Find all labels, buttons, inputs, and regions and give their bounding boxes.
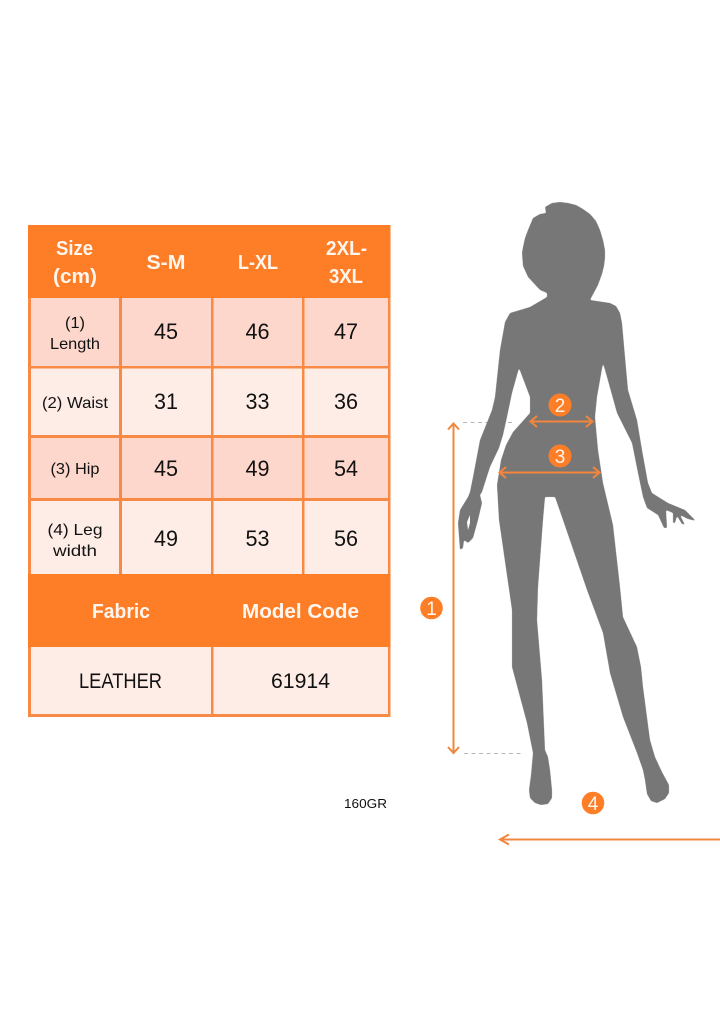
- row: leg width: width: [52, 543, 97, 560]
- header row: Size: [56, 238, 93, 260]
- dashed guide lines: [463, 422, 524, 754]
- row: hip: 49: [246, 456, 270, 481]
- row: waist: 36: [334, 389, 358, 414]
- row: waist: (2) Waist: [42, 395, 109, 412]
- fabric and model code values: 61914: [271, 670, 330, 693]
- size table: [28, 225, 390, 717]
- row: hip: 45: [154, 456, 178, 481]
- header row: 3XL: [329, 266, 363, 288]
- arrow 2: waist: [530, 416, 592, 427]
- row: leg width: [31, 501, 388, 574]
- arrow 4: leg width: [500, 834, 720, 844]
- row: waist: 33: [246, 389, 270, 414]
- fabric and model code header: Fabric: [92, 601, 150, 623]
- row: leg width: 49: [154, 526, 178, 551]
- marker 3: [548, 444, 572, 468]
- fabric and model code header: Model Code: [242, 601, 359, 623]
- marker 1: [420, 597, 443, 620]
- row: waist: 31: [154, 389, 178, 414]
- row: leg width: 56: [334, 526, 358, 551]
- header row: (cm): [53, 266, 97, 288]
- marker 4: [582, 792, 604, 815]
- row: length: [31, 298, 388, 366]
- row: hip: (3) Hip: [50, 461, 100, 478]
- row: length: 47: [334, 319, 358, 344]
- row: hip: 54: [334, 456, 358, 481]
- row: length: Length: [50, 336, 100, 353]
- fabric and model code values: [31, 647, 388, 714]
- row: length: 45: [154, 319, 178, 344]
- header row: S-M: [146, 252, 186, 274]
- arrow 1: length: [448, 424, 459, 753]
- weight note: 160GR: [344, 796, 387, 811]
- header row: [28, 225, 390, 298]
- marker 2: [548, 394, 572, 417]
- marker 4: 4: [588, 794, 599, 815]
- fabric and model code header: [28, 574, 390, 647]
- row: length: (1): [65, 315, 85, 332]
- row: leg width: 53: [246, 526, 270, 551]
- row: leg width: (4) Leg: [48, 522, 102, 539]
- marker 2: 2: [555, 396, 565, 417]
- body silhouette: [458, 202, 696, 805]
- marker 1: 1: [426, 599, 437, 620]
- row: length: 46: [246, 319, 270, 344]
- row: waist: [31, 368, 388, 435]
- header row: L-XL: [238, 252, 278, 274]
- fabric and model code values: LEATHER: [79, 670, 162, 693]
- row: hip: [31, 438, 388, 498]
- arrow 3: hip: [500, 467, 600, 478]
- marker 3: 3: [555, 447, 565, 468]
- header row: 2XL-: [326, 238, 367, 260]
- table frame: [28, 225, 390, 717]
